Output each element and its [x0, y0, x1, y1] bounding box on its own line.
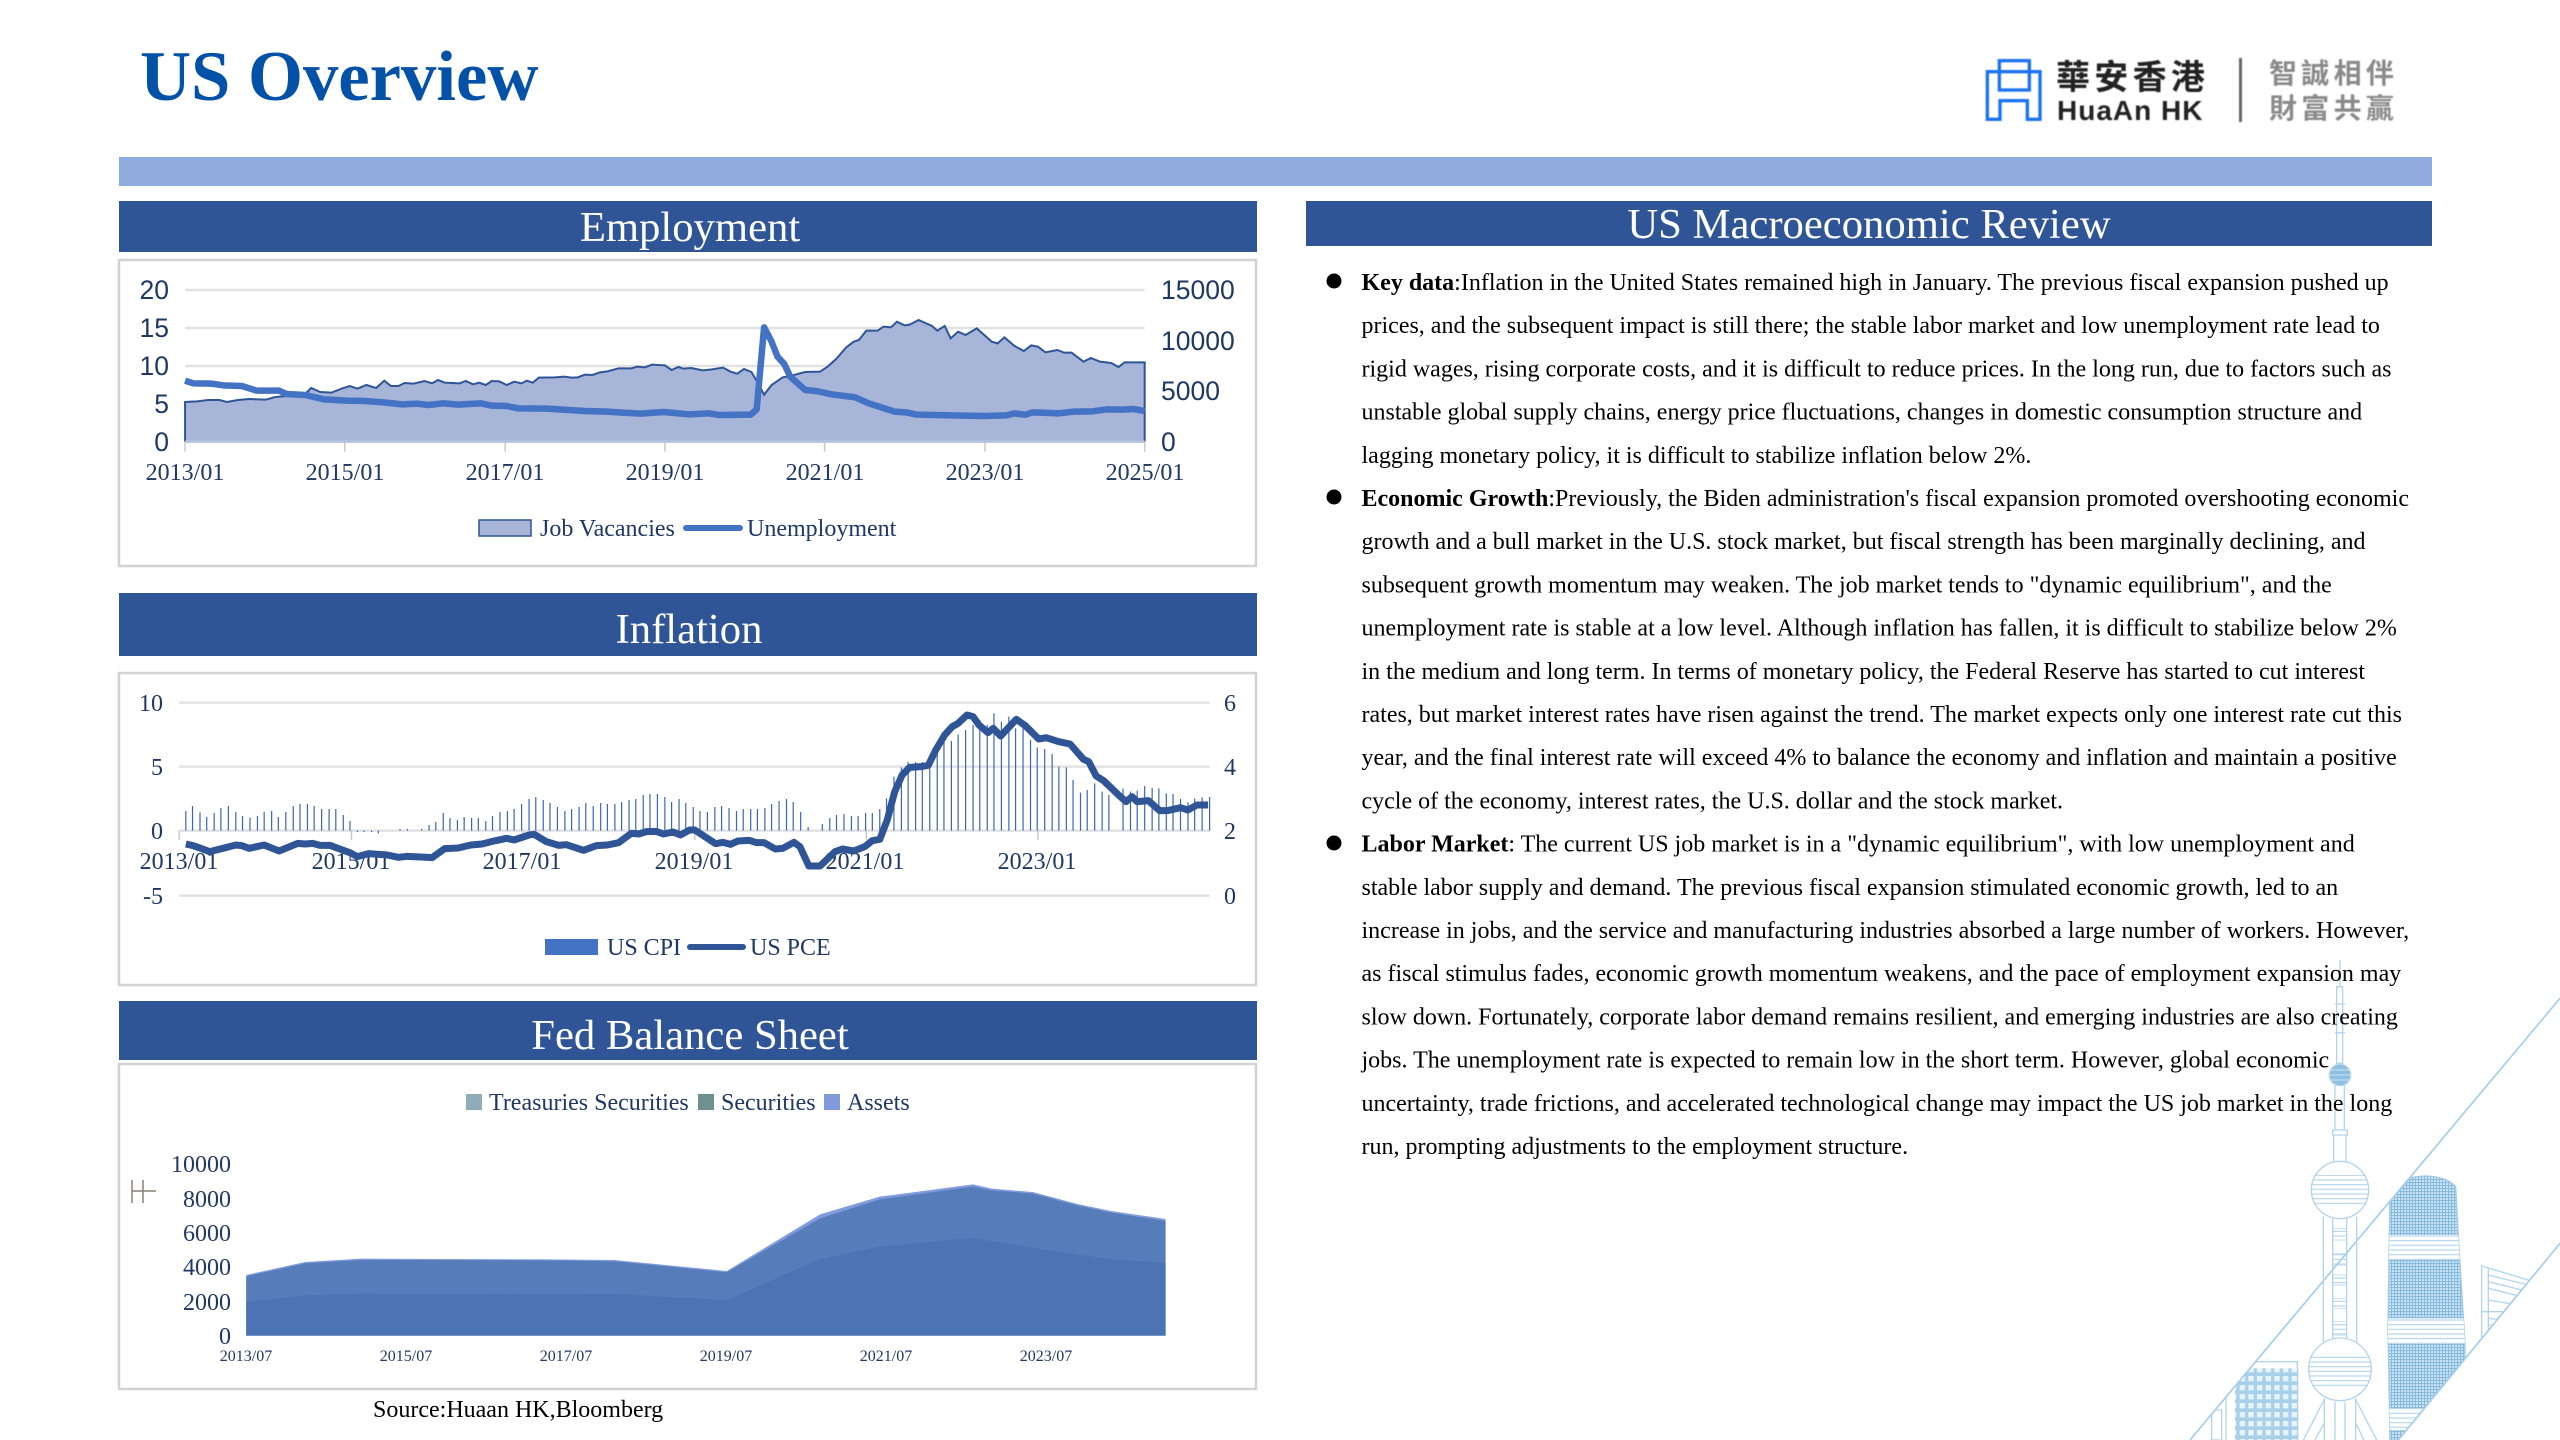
bullet: economic growth: cycle of the economy, interest rates, the U.S. dollar and the stock market.: [1362, 788, 2063, 814]
logo chinese name: 華安香港: [2056, 50, 2209, 99]
left axis labels: 8000: [183, 1187, 231, 1213]
heading: US macroeconomic review: US Macroeconomic Review: [1627, 201, 2111, 248]
logo icon: [1987, 61, 2040, 119]
bullet: economic growth: year, and the final interest rate will exceed 4% to balance the economy and inflation and maintain a positive: [1362, 745, 2397, 771]
heading: inflation: Inflation: [616, 606, 762, 653]
logo slogan: 智誠相伴: [2269, 52, 2398, 92]
legend: US CPI: [607, 935, 681, 961]
date labels: 2021/01: [786, 460, 864, 486]
date labels: [220, 1348, 1072, 1365]
legend: [545, 935, 831, 961]
heading: employment: [119, 201, 1257, 252]
title: US Overview: [140, 38, 538, 116]
right axis labels: 0: [1224, 884, 1236, 910]
date labels: [146, 460, 1184, 486]
bullet: key data: Key data: [1362, 270, 1454, 296]
date labels: 2017/01: [483, 849, 561, 875]
bullet: key data: prices, and the subsequent impact is still there; the stable labor market and low unemployment rate lead to: [1362, 313, 2380, 339]
bullet: labor market: stable labor supply and demand. The previous fiscal expansion stimulated economic growth, led to an: [1362, 875, 2338, 901]
bullet: economic growth: in the medium and long term. In terms of monetary policy, the Federal Reserve has started to cut interest: [1362, 659, 2365, 685]
bullet: labor market: Labor Market: [1362, 832, 1508, 858]
gridlines: [179, 703, 1210, 896]
heading: US macroeconomic review: [1306, 201, 2432, 248]
date labels: 2013/01: [146, 460, 224, 486]
area: assets: [246, 1184, 1166, 1336]
date labels: 2023/01: [998, 849, 1076, 875]
left axis labels: 20: [140, 275, 169, 305]
left axis labels: 10000: [171, 1152, 231, 1178]
heading: fed balance sheet: [119, 1001, 1257, 1060]
bullet: key data: lagging monetary policy, it is difficult to stabilize inflation below 2%.: [1362, 443, 2031, 469]
left axis labels: 2000: [183, 1290, 231, 1316]
bullet: key data: rigid wages, rising corporate costs, and it is difficult to reduce prices. In the long run, due to factors such as: [1362, 356, 2391, 382]
date labels: [140, 849, 1076, 875]
date labels: 2017/01: [466, 460, 544, 486]
heading: employment: Employment: [580, 204, 800, 251]
bullet: economic growth: subsequent growth momentum may weaken. The job market tends to "dynamic equilibrium", and the: [1362, 572, 2332, 598]
left axis labels: 0: [219, 1324, 231, 1350]
date labels: 2015/01: [312, 849, 390, 875]
source note: Source:Huaan HK,Bloomberg: [373, 1397, 663, 1423]
legend: US PCE: [750, 935, 831, 961]
area: securities: [246, 1187, 1166, 1336]
panel: fed balance sheet chart: [119, 1064, 1256, 1389]
date labels: 2013/01: [140, 849, 218, 875]
panel: inflation chart: [119, 673, 1256, 985]
gridlines: [185, 290, 1145, 452]
bullet: economic growth: Economic Growth: [1362, 486, 1548, 512]
left axis labels: 0: [151, 819, 163, 845]
skyline decoration: [2190, 960, 2560, 1440]
date labels: 2019/01: [655, 849, 733, 875]
bullet: economic growth: rates, but market interest rates have risen against the trend. The market expects only one interest rate cut this: [1362, 702, 2402, 728]
date labels: 2015/01: [306, 460, 384, 486]
left axis labels: [139, 691, 163, 910]
date labels: 2019/07: [700, 1348, 752, 1365]
date labels: 2023/01: [946, 460, 1024, 486]
right axis labels: 6: [1224, 691, 1236, 717]
bars: US CPI: [186, 713, 1210, 833]
bullet: key data: [1326, 270, 2391, 469]
right axis labels: [1224, 691, 1236, 910]
legend: Job Vacancies: [540, 516, 675, 542]
heading: fed balance sheet: Fed Balance Sheet: [531, 1012, 849, 1059]
legend: [466, 1090, 910, 1116]
area: treasuries securities: [246, 1238, 1166, 1336]
right axis labels: 10000: [1161, 326, 1235, 356]
legend: [479, 516, 897, 542]
legend: Unemployment: [747, 516, 897, 542]
right axis labels: 5000: [1161, 376, 1220, 406]
left axis labels: [140, 275, 169, 457]
left axis labels: 10: [139, 691, 163, 717]
bullet: labor market: uncertainty, trade frictions, and accelerated technological change may impact the US job market in the long: [1362, 1091, 2392, 1117]
left axis labels: 15: [140, 313, 169, 343]
bullet: labor market: [1326, 832, 2409, 1160]
date labels: 2021/07: [860, 1348, 912, 1365]
date labels: 2021/01: [826, 849, 904, 875]
date labels: 2023/07: [1020, 1348, 1072, 1365]
bullet: key data: unstable global supply chains, energy price fluctuations, changes in domestic consumption structure and: [1362, 400, 2362, 426]
date labels: 2019/01: [626, 460, 704, 486]
legend: Treasuries Securities: [489, 1090, 689, 1116]
right axis labels: 0: [1161, 427, 1176, 457]
bullet: economic growth: [1326, 486, 2409, 814]
logo divider: [2239, 58, 2242, 122]
right axis labels: 15000: [1161, 275, 1235, 305]
date labels: 2013/07: [220, 1348, 272, 1365]
left axis labels: 4000: [183, 1255, 231, 1281]
bullet: economic growth: :Previously, the Biden administration's fiscal expansion promoted overshooting economic: [1548, 486, 2409, 512]
logo english name: HuaAn HK: [2057, 95, 2203, 126]
legend: Assets: [847, 1090, 910, 1116]
bullet: economic growth: growth and a bull market in the U.S. stock market, but fiscal strength has been marginally declining, and: [1362, 529, 2365, 555]
right axis labels: [1161, 275, 1235, 457]
bullet: labor market: jobs. The unemployment rate is expected to remain low in the short term. However, global economic: [1360, 1048, 2329, 1074]
heading: inflation: [119, 593, 1257, 656]
left axis labels: 5: [154, 389, 169, 419]
date labels: 2025/01: [1106, 460, 1184, 486]
bullet: labor market: as fiscal stimulus fades, economic growth momentum weakens, and the pace of employment expansion may: [1362, 961, 2401, 987]
left axis labels: -5: [143, 884, 163, 910]
top band: [119, 157, 2432, 186]
right axis labels: 4: [1224, 755, 1236, 781]
bullet: labor market: : The current US job market is in a "dynamic equilibrium", with low unemployment and: [1508, 832, 2355, 858]
bullet: labor market: increase in jobs, and the service and manufacturing industries absorbed a large number of workers. However,: [1362, 918, 2409, 944]
date labels: 2017/07: [540, 1348, 592, 1365]
left axis labels: 6000: [183, 1221, 231, 1247]
left axis labels: 5: [151, 755, 163, 781]
area: job vacancies: [185, 320, 1145, 442]
line: unemployment: [185, 327, 1145, 416]
axis glyph: [132, 1180, 156, 1203]
logo slogan: 財富共贏: [2269, 87, 2398, 127]
panel: employment chart: [119, 260, 1256, 566]
text block: macroeconomic review: [1326, 270, 2409, 1160]
logo: [1987, 50, 2398, 127]
line: US PCE: [186, 715, 1208, 866]
left axis labels: [171, 1152, 231, 1350]
left axis labels: 10: [140, 351, 169, 381]
bullet: labor market: run, prompting adjustments to the employment structure.: [1362, 1134, 1908, 1160]
bullet: labor market: slow down. Fortunately, corporate labor demand remains resilient, and emerging industries are also creating: [1362, 1004, 2398, 1030]
right axis labels: 2: [1224, 819, 1236, 845]
left axis labels: 0: [154, 427, 169, 457]
bullet: economic growth: unemployment rate is stable at a low level. Although inflation has fallen, it is difficult to stabilize below 2%: [1362, 616, 2397, 642]
bullet: key data: :Inflation in the United States remained high in January. The previous fiscal expansion pushed up: [1454, 270, 2389, 296]
date labels: 2015/07: [380, 1348, 432, 1365]
legend: Securities: [721, 1090, 816, 1116]
